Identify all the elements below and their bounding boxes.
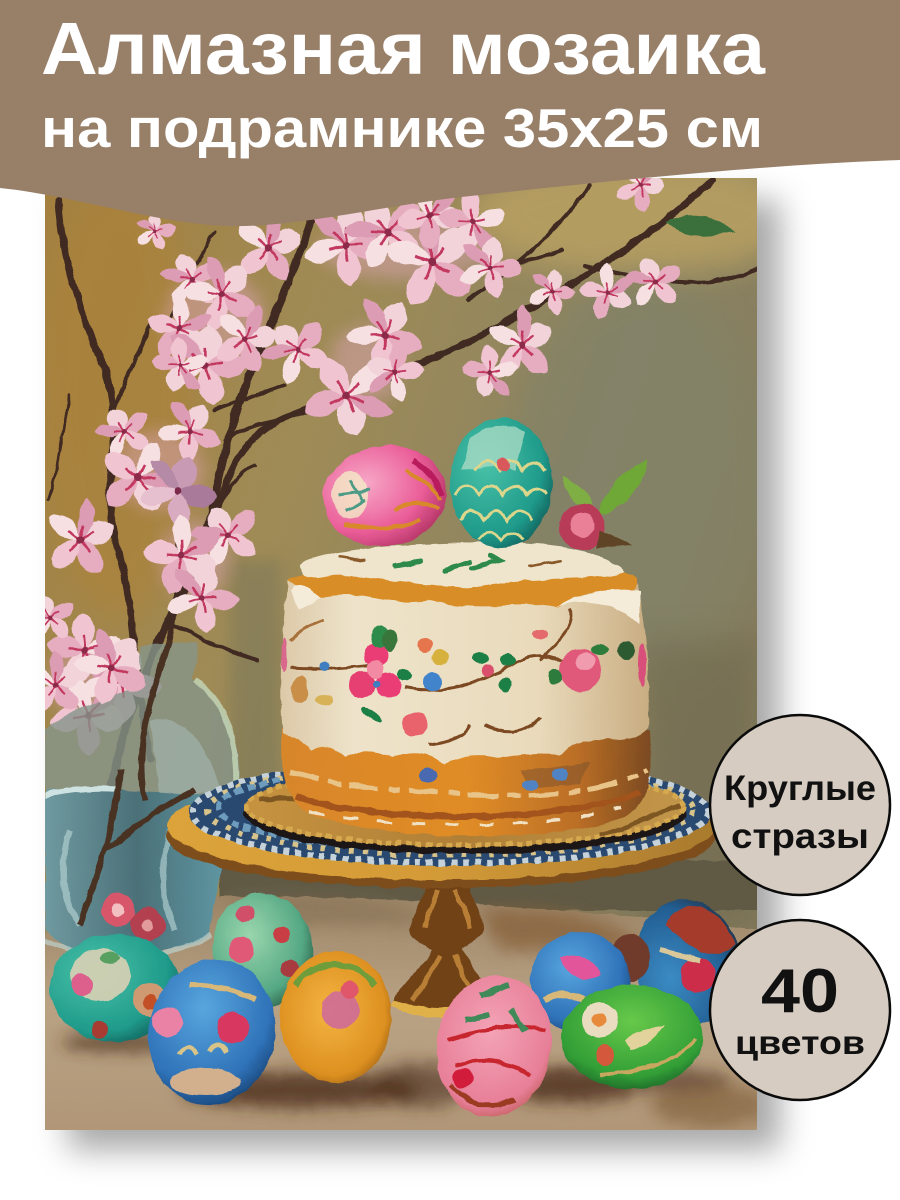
cake stand plate [166, 804, 715, 889]
glass vase [45, 640, 240, 956]
badge: round rhinestones: стразы [731, 817, 869, 856]
small flowers and leaves [403, 712, 427, 736]
navy egg back right [638, 898, 738, 1024]
green egg [561, 985, 703, 1089]
badge: round rhinestones: Круглые [724, 769, 876, 808]
green top decoration [340, 555, 560, 570]
floral decor on cake [281, 610, 646, 790]
mint egg [212, 892, 314, 1007]
blue egg back [530, 932, 630, 1032]
small roses by vase [101, 893, 165, 942]
bottom eggs [50, 884, 750, 1126]
egg cast shadows [60, 1032, 730, 1108]
header banner [0, 0, 900, 226]
cake crust band [288, 572, 638, 608]
badge: 40 colours: 40 [761, 957, 839, 1026]
rose and leaves [559, 460, 648, 550]
cake stand foot [392, 885, 492, 1016]
table [35, 896, 767, 1140]
teal egg left [50, 934, 180, 1042]
pink flower right [559, 649, 601, 691]
blossoms in front of vase neck [74, 628, 146, 704]
blossoms [15, 161, 690, 761]
branches [46, 178, 757, 786]
leaf upper right [665, 216, 735, 236]
cake cream body [281, 580, 649, 764]
badge: 40 colours [710, 920, 890, 1100]
top egg: teal scales [450, 418, 552, 548]
gold card base [243, 782, 686, 854]
subtitle: на подрамнике 35х25 см [41, 97, 763, 159]
pink egg [436, 975, 552, 1116]
painting [45, 178, 757, 1130]
orange egg [280, 951, 392, 1083]
top egg: pink [322, 444, 447, 546]
title: Алмазная мозаика [41, 7, 766, 90]
pink flower left [364, 644, 388, 665]
cake [281, 542, 651, 836]
blue egg front [148, 959, 276, 1106]
soft pink blossom masses [50, 220, 490, 720]
cake bottom crust [282, 730, 651, 836]
badge: 40 colours: цветов [735, 1024, 865, 1061]
badge: round rhinestones [710, 715, 890, 895]
canvas drop shadow [68, 200, 780, 1150]
shadow band under the plate [220, 860, 760, 910]
cake top surface [300, 542, 625, 588]
painting background wall [45, 178, 757, 934]
lace doily [188, 772, 710, 867]
small dark egg [610, 934, 650, 982]
